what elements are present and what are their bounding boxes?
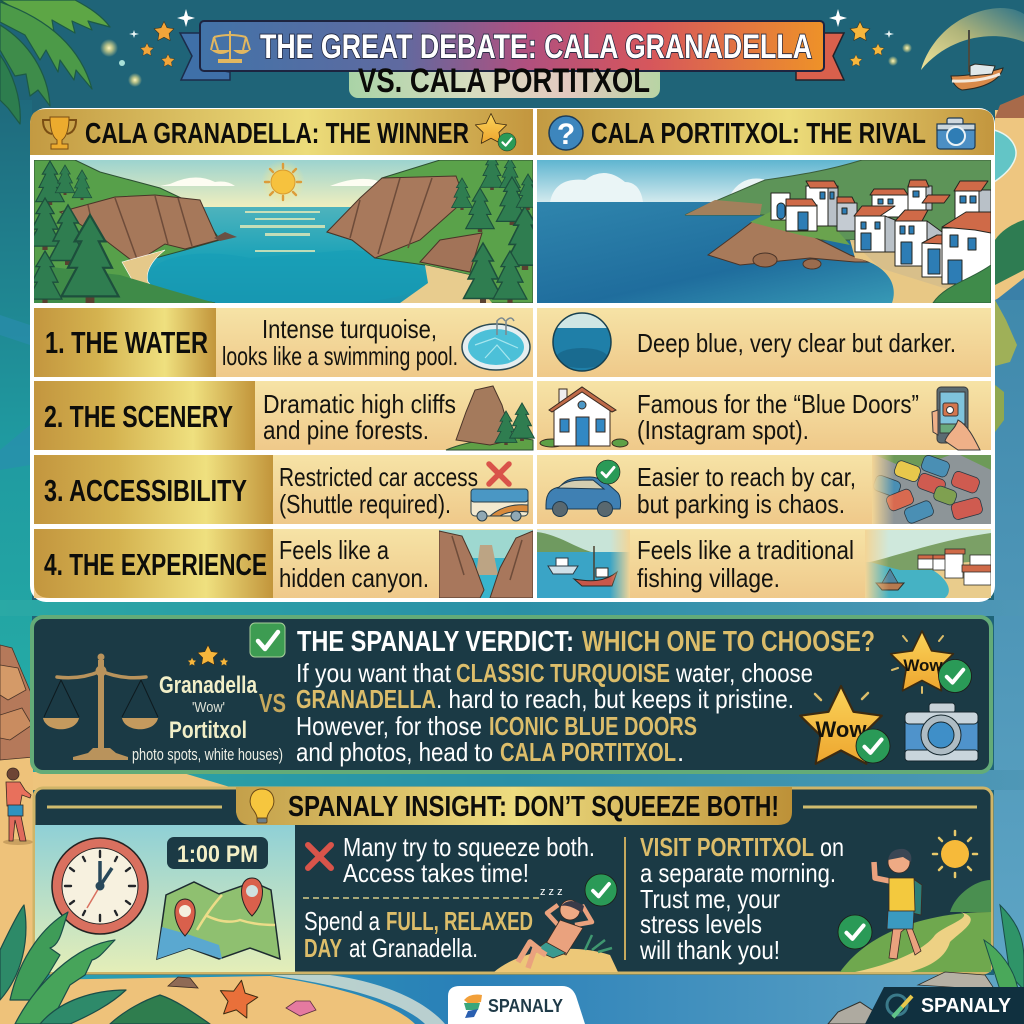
- rock: [168, 977, 198, 988]
- subtitle plate: [349, 58, 660, 98]
- verdict heading: THE SPANALY VERDICT:: [297, 626, 574, 658]
- verdict panel: [32, 617, 991, 772]
- label: the scenery: 2. THE SCENERY: [44, 399, 233, 434]
- logo tab right: [865, 987, 1024, 1024]
- icon: comet and sailing boat: [921, 8, 1024, 90]
- icon: relaxing person on beach: z z z: [540, 886, 563, 898]
- icon: car with check: [546, 460, 621, 516]
- comparison labels: Portitxol: [169, 717, 247, 744]
- row 4: the experience, Granadella: [34, 529, 533, 598]
- row 2: the scenery, Portitxol: [537, 381, 991, 450]
- title banner: [180, 21, 844, 100]
- text: easier by car: [637, 462, 856, 519]
- icon: trophy: [43, 117, 76, 149]
- row 3: accessibility, Portitxol: [537, 454, 991, 525]
- icon: waving hiker: [874, 849, 922, 959]
- icon: phone in hand: [932, 387, 980, 450]
- icon: small stars: [188, 645, 228, 666]
- icon: wow star bottom: Wow: [816, 717, 867, 742]
- verdict heading: WHICH ONE TO CHOOSE?: [582, 626, 875, 658]
- icon: camera: [937, 118, 975, 149]
- icon: shuttle bus: [471, 489, 528, 521]
- comparison labels: photo spots, white houses): [132, 745, 283, 764]
- text: many try: Many try to squeeze both.: [343, 832, 595, 862]
- icon: light bulb: [250, 789, 274, 823]
- insight header: SPANALY INSIGHT:: [288, 791, 507, 823]
- verdict body text: If you want that: [296, 658, 452, 688]
- icon: camera: [905, 703, 978, 761]
- icon: swimming pool: [462, 318, 530, 370]
- banner plate: [200, 21, 824, 71]
- icon: red cross: [489, 464, 509, 484]
- row 1: the water, Portitxol: [537, 308, 991, 377]
- text: fishing village: fishing village.: [637, 563, 780, 593]
- comparison labels: [132, 672, 286, 764]
- text: spend a full day: at Granadella.: [349, 933, 478, 963]
- text: spend a full day: Spend a: [304, 906, 380, 936]
- title line 2: VS. CALA PORTITXOL: [358, 62, 650, 100]
- text: visit portitxol: [639, 832, 844, 965]
- text: dramatic cliffs: [263, 389, 456, 445]
- time badge: 1:00 PM: [177, 841, 258, 868]
- left ribbon: [180, 33, 230, 80]
- left section: clock and map: [35, 825, 295, 972]
- text: intense turquoise: looks like a swimming pool.: [222, 341, 458, 371]
- icon: question mark: [549, 116, 583, 151]
- verdict body text: [296, 658, 813, 767]
- label: the water: [34, 308, 216, 377]
- verdict body text: CLASSIC TURQUOISE: [456, 658, 670, 688]
- comparison labels: Granadella: [159, 672, 258, 699]
- icon: red cross: [308, 845, 331, 868]
- text: hidden canyon: [279, 535, 429, 593]
- text: hidden canyon: hidden canyon.: [279, 563, 429, 593]
- text: dramatic cliffs: and pine forests.: [263, 415, 429, 445]
- text: visit portitxol: VISIT PORTITXOL: [640, 832, 814, 862]
- starfish: [216, 977, 260, 1019]
- text: visit portitxol: on: [820, 832, 844, 862]
- decorative stars right: [829, 9, 912, 66]
- shell: [286, 1001, 316, 1016]
- icon: green check box: [250, 623, 285, 657]
- decorative stars left: [100, 9, 195, 87]
- verdict body text: CALA PORTITXOL: [500, 737, 676, 767]
- row 4: the experience, Portitxol: [537, 529, 991, 598]
- text: spend a full day: FULL, RELAXED: [386, 906, 533, 936]
- logo tab right: SPANALY: [921, 995, 1012, 1017]
- label: the water: 1. THE WATER: [45, 325, 208, 360]
- text: restricted access: [279, 462, 478, 519]
- illustration: Cala Portitxol village: [537, 160, 991, 303]
- insight header: [47, 787, 977, 825]
- icon: sun: [933, 831, 977, 877]
- icon: wow star bottom: [800, 686, 890, 764]
- village houses: [771, 180, 991, 284]
- text: many try: Access takes time!: [343, 858, 529, 888]
- text: hidden canyon: Feels like a: [279, 535, 389, 565]
- icon: star with check: [475, 114, 516, 151]
- verdict body text: .: [677, 737, 684, 767]
- insight header: DON’T SQUEEZE BOTH!: [514, 791, 779, 823]
- row 1: the water, Granadella: [34, 308, 533, 377]
- icon: person on beach: [3, 768, 33, 845]
- icon: spanaly logo: [464, 995, 482, 1018]
- text: easier by car: Easier to reach by car,: [637, 462, 856, 492]
- illustration: fishing village: [865, 530, 991, 598]
- text: intense turquoise: [222, 314, 458, 371]
- left headland: [34, 160, 220, 303]
- text: blue doors: [637, 389, 919, 445]
- decorative beach objects: [168, 977, 316, 1019]
- comparison labels: 'Wow': [192, 699, 225, 716]
- icon: balance scale: [43, 654, 158, 760]
- bottom-left tropical leaves: [0, 905, 210, 1024]
- text: dramatic cliffs: Dramatic high cliffs: [263, 389, 456, 419]
- illustration: hidden canyon: [439, 530, 533, 598]
- text: fishing village: Feels like a traditional: [637, 535, 854, 565]
- text: easier by car: but parking is chaos.: [637, 489, 845, 519]
- illustration: chaotic parking lot: [872, 454, 991, 525]
- insight panel: [34, 787, 992, 973]
- text: many try: [343, 832, 595, 888]
- row 3: accessibility, Granadella: [34, 455, 533, 524]
- text: spend a full day: DAY: [304, 933, 342, 963]
- text: visit portitxol: stress levels: [640, 909, 762, 939]
- sun: [264, 162, 302, 202]
- main comparison panel: [28, 108, 995, 602]
- text: restricted access: Restricted car access: [279, 462, 478, 492]
- text: fishing village: [637, 535, 854, 593]
- icon: house with blue door: [540, 387, 628, 447]
- icon: wow star top: Wow: [903, 656, 943, 675]
- label: accessibility: [34, 455, 273, 524]
- illustration: Cala Granadella cove: [28, 154, 546, 303]
- logo tab center: [448, 986, 585, 1024]
- logo tab center: SPANALY: [488, 996, 563, 1016]
- header: Cala Granadella: CALA GRANADELLA: THE WINNER: [85, 118, 469, 150]
- verdict body text: . hard to reach, but keeps it pristine.: [436, 684, 794, 714]
- verdict body text: and photos, head to: [296, 737, 493, 767]
- icon: check: [585, 874, 617, 906]
- right ribbon: [796, 33, 844, 80]
- label: the experience: 4. THE EXPERIENCE: [44, 547, 267, 582]
- text: restricted access: (Shuttle required).: [279, 489, 451, 519]
- text: spend a full day: [304, 906, 533, 963]
- verdict body text: However, for those: [296, 711, 482, 741]
- icon: spanaly mark: [887, 995, 912, 1017]
- label: accessibility: 3. ACCESSIBILITY: [44, 473, 247, 508]
- title line 1: THE GREAT DEBATE: CALA GRANADELLA: [260, 28, 812, 66]
- comparison labels: VS: [259, 688, 286, 718]
- text: visit portitxol: Trust me, your: [640, 884, 780, 914]
- verdict body text: GRANADELLA: [296, 684, 436, 714]
- icon: relaxing person on beach: [494, 886, 618, 972]
- row 2: the scenery, Granadella: [34, 381, 534, 450]
- bottom-right rocks and leaves: [828, 905, 1024, 1024]
- verdict body text: ICONIC BLUE DOORS: [489, 711, 697, 741]
- verdict heading: [297, 626, 875, 658]
- icon: question mark: ?: [557, 118, 575, 151]
- text: intense turquoise: Intense turquoise,: [262, 314, 437, 344]
- header: Cala Portitxol: CALA PORTITXOL: THE RIVAL: [591, 118, 926, 150]
- icon: check: [838, 915, 872, 949]
- header: Cala Portitxol: [537, 109, 994, 155]
- illustration: hill, bush and path: [840, 880, 991, 972]
- icon: scales: [211, 31, 250, 62]
- text: visit portitxol: will thank you!: [639, 935, 780, 965]
- text: blue doors: Famous for the “Blue Doors”: [637, 389, 919, 419]
- palm leaves top left: [0, 0, 110, 124]
- illustration: fishing boats: [537, 530, 630, 598]
- text: blue doors: (Instagram spot).: [637, 415, 809, 445]
- verdict body text: water, choose: [675, 658, 813, 688]
- icon: cliffs and pines: [446, 386, 534, 450]
- icon: deep water circle: [553, 313, 611, 371]
- icon: clock: [52, 838, 148, 934]
- text: visit portitxol: a separate morning.: [640, 858, 836, 888]
- decorative rock left: [0, 645, 34, 760]
- icon: map with pins: [157, 878, 280, 959]
- label: the experience: [34, 529, 273, 598]
- right headland: [327, 160, 533, 303]
- icon: wow star top: [891, 631, 972, 693]
- text: deep blue: Deep blue, very clear but darker.: [637, 328, 956, 358]
- header: Cala Granadella: [30, 109, 533, 155]
- label: the scenery: [34, 381, 255, 450]
